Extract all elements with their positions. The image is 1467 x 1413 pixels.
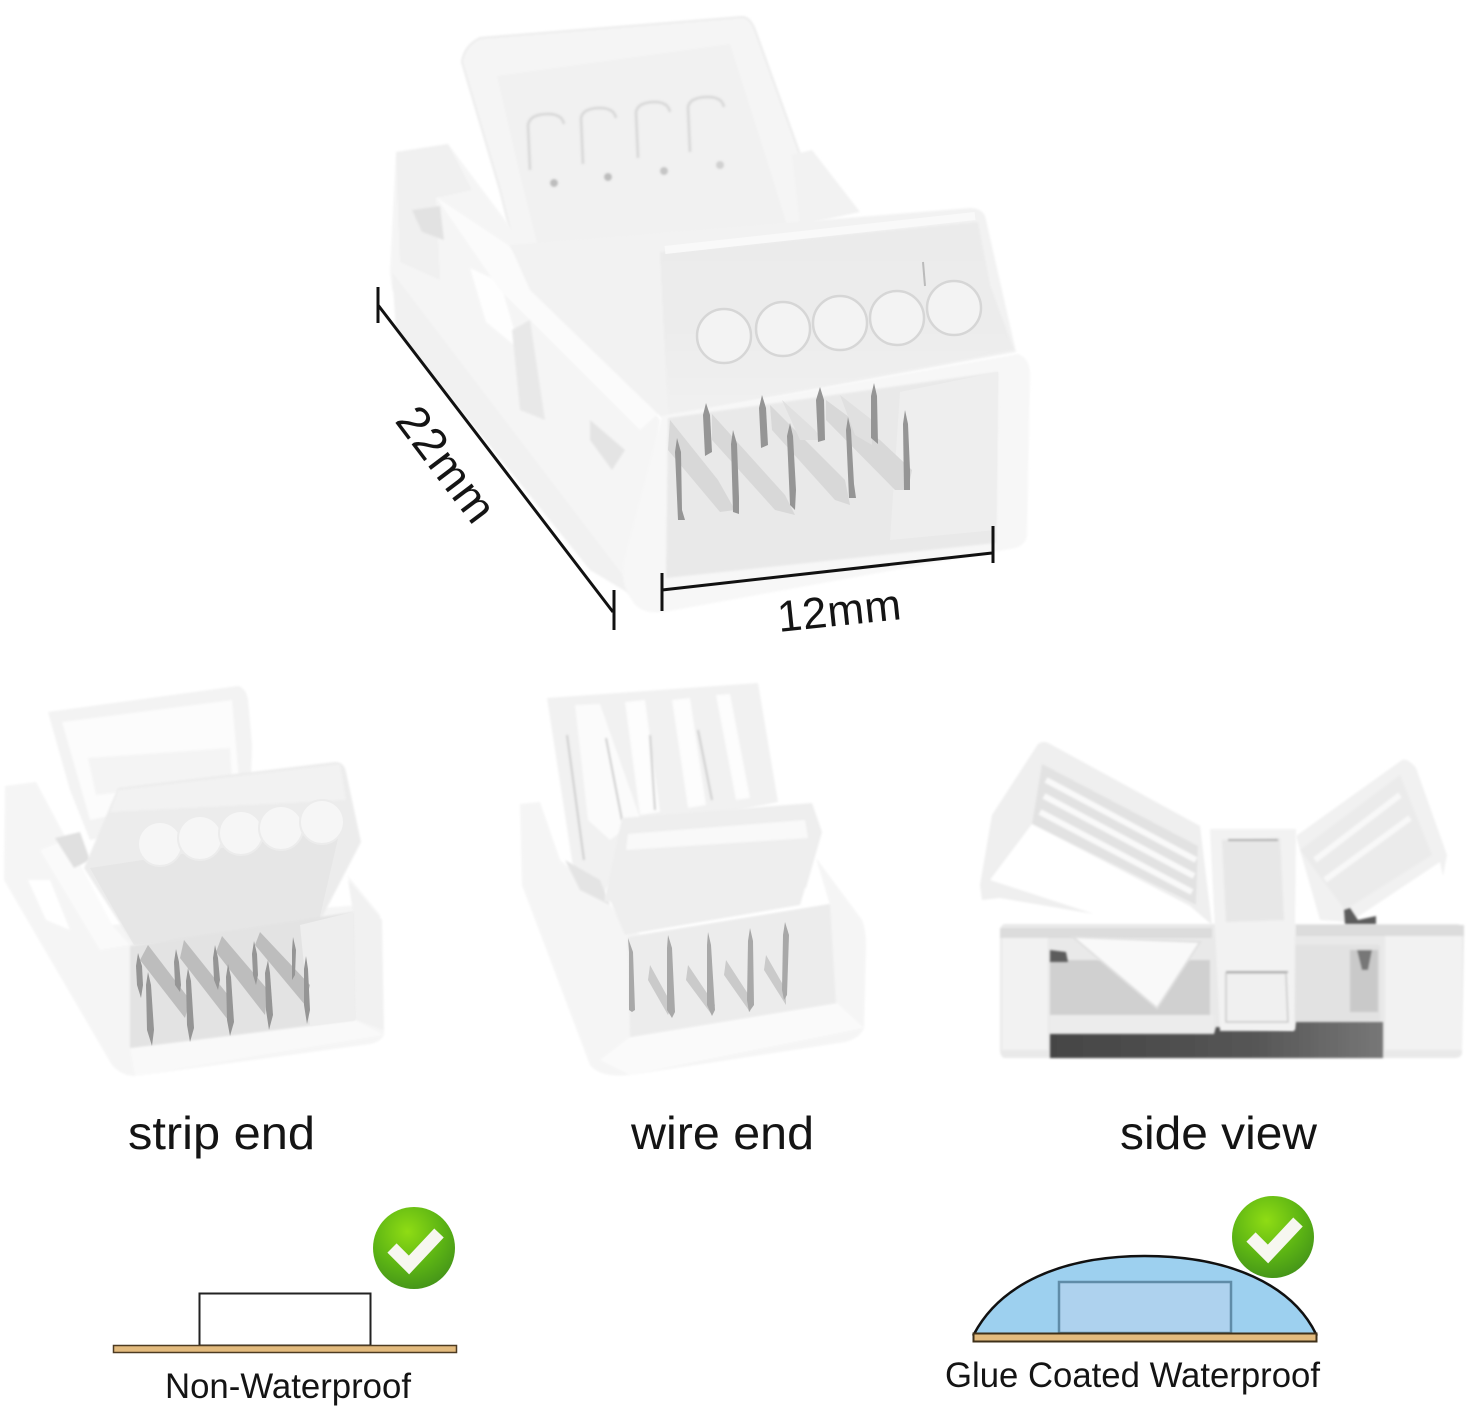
- right rear post: [792, 150, 860, 225]
- icon: green check: [1232, 1196, 1314, 1278]
- lid: [84, 762, 361, 945]
- back flap with ribs: [547, 683, 778, 900]
- metal contacts: [1050, 908, 1376, 962]
- strip component: [1059, 1282, 1231, 1333]
- lid: [604, 803, 822, 935]
- caption: Glue Coated Waterproof: [945, 1356, 1320, 1395]
- diagram: glue coated waterproof: [945, 1196, 1320, 1395]
- strip end connector photo: [4, 686, 384, 1076]
- label: strip end: strip end: [128, 1107, 315, 1159]
- body: [4, 782, 384, 1076]
- connector body: [390, 144, 660, 600]
- strip component: [200, 1294, 370, 1346]
- dimension: 12mm: 12mm: [775, 580, 903, 642]
- opening and pins: [628, 904, 836, 1037]
- circuit board: [114, 1346, 456, 1352]
- dimension: 22mm: 22mm: [386, 396, 507, 532]
- lid with five round contacts: [510, 208, 1016, 418]
- back flap: [48, 686, 252, 840]
- caption: Non-Waterproof: [165, 1367, 411, 1406]
- icon: green check: [373, 1207, 455, 1289]
- wire end connector photo: [520, 683, 866, 1076]
- label: side view: side view: [1120, 1107, 1318, 1159]
- circuit board: [974, 1334, 1316, 1342]
- back flap: [462, 17, 815, 270]
- dimension: 22mm: [378, 287, 614, 630]
- base block: [1000, 924, 1464, 1058]
- dimension: 12mm: [662, 526, 993, 642]
- left open flap: [980, 742, 1212, 925]
- front rim: [623, 354, 1030, 612]
- right open flap: [1296, 760, 1447, 922]
- side view connector photo: [980, 742, 1464, 1058]
- diagram: non-waterproof: [114, 1207, 456, 1406]
- main connector photo: [390, 17, 1030, 612]
- label: wire end: wire end: [630, 1107, 814, 1159]
- glue dome: [974, 1256, 1316, 1334]
- inner flap: [1073, 937, 1200, 1008]
- opening and pins: [130, 912, 355, 1048]
- metal strip: [1050, 1022, 1383, 1058]
- centre hinge: [1210, 829, 1296, 1031]
- front opening with pins: [666, 372, 998, 578]
- body: [520, 802, 866, 1076]
